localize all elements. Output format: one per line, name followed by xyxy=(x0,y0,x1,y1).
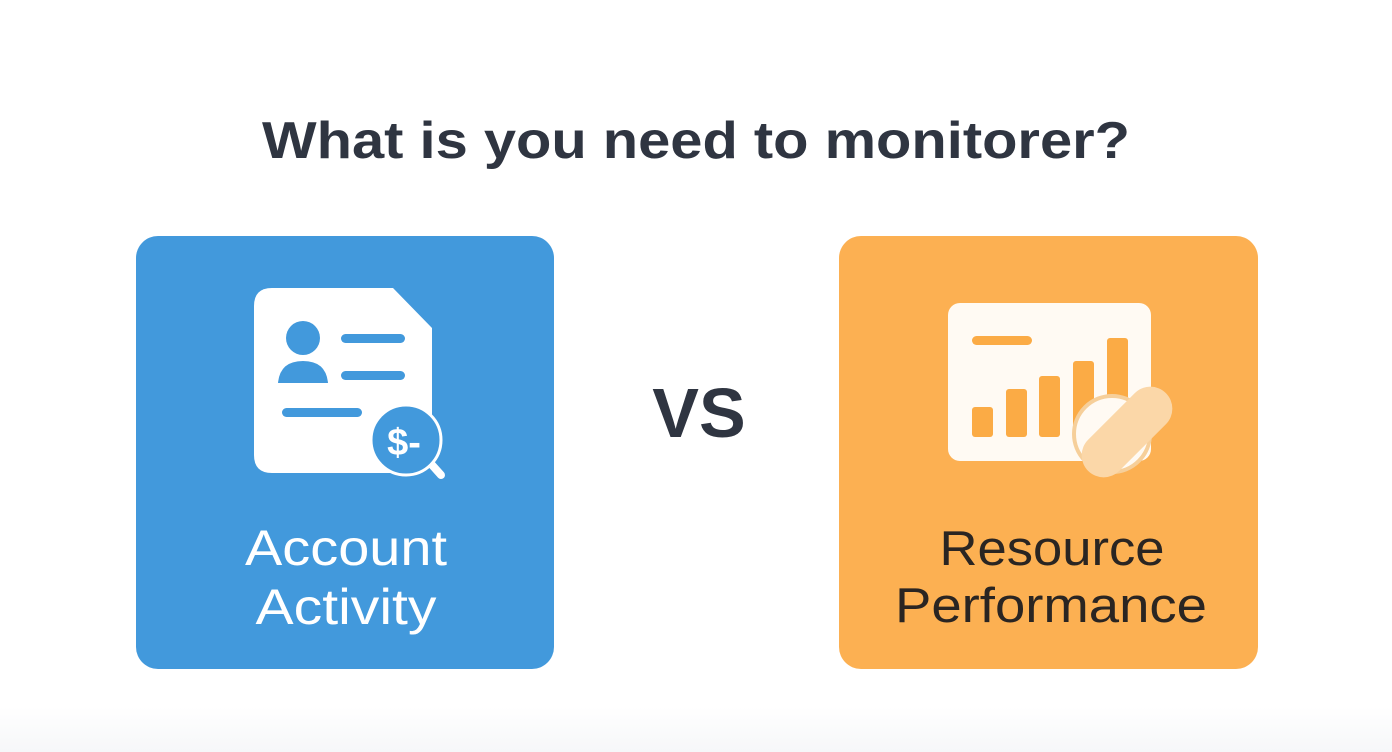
panel: resource performance xyxy=(839,236,1258,669)
panel: account activity: Activity xyxy=(256,579,436,635)
panel: resource performance: Performance xyxy=(895,579,1207,633)
icon: gauge badge xyxy=(1073,378,1181,486)
title: What is you need to monitorer? xyxy=(262,112,1130,170)
panel: account activity xyxy=(136,236,554,669)
icon: account document xyxy=(254,288,441,475)
icon: magnifier with dollar: $- xyxy=(387,422,421,464)
vs label: VS xyxy=(652,374,746,452)
text: resource performance label: Resource xyxy=(940,522,1164,576)
icon: magnifier with dollar xyxy=(371,405,441,475)
text: account activity label: Account xyxy=(245,520,447,576)
icon: performance chart xyxy=(948,303,1181,486)
